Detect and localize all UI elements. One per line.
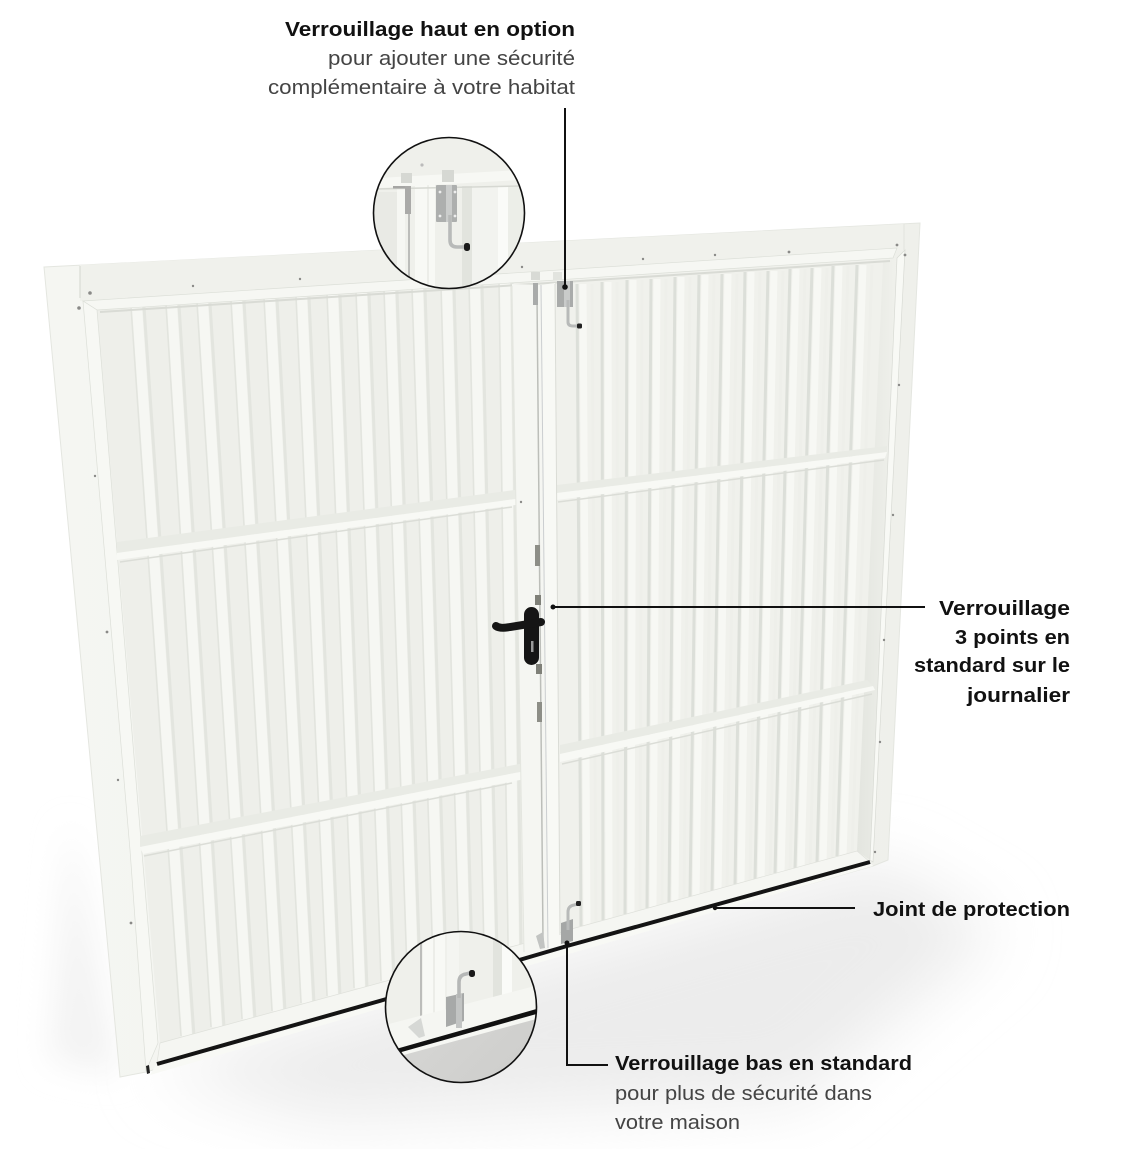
heading: top bolt: Verrouillage haut en option	[285, 19, 575, 41]
right door rail upper	[557, 446, 887, 502]
left door rail upper	[117, 488, 530, 562]
bottom rail	[157, 851, 870, 1063]
right door corrugated panel	[555, 258, 897, 935]
icon: top bolt on door	[557, 281, 582, 328]
text: top bolt line 1: pour ajouter une sécurité	[328, 48, 575, 70]
outer frame	[44, 223, 920, 1077]
left door corrugated panel	[97, 282, 530, 1043]
lock slots	[535, 545, 542, 722]
door centre stiles	[512, 284, 548, 957]
bottom seal	[157, 862, 870, 1064]
heading: three-point lock: journalier	[966, 685, 1070, 707]
heading: three-point lock: 3 points en	[955, 627, 1070, 649]
garage door	[44, 223, 920, 1077]
right door rail lower	[560, 680, 875, 764]
lens: bottom bolt detail	[384, 930, 538, 1084]
left stile	[83, 301, 158, 1071]
text: bottom bolt line 1: pour plus de sécurité dans	[615, 1083, 872, 1105]
callout: three-point lock	[550, 598, 1070, 707]
small gussets	[531, 272, 540, 280]
heading: bottom bolt: Verrouillage bas en standard	[615, 1053, 912, 1075]
top rail	[83, 248, 897, 310]
lens: top bolt detail	[372, 136, 526, 290]
lower rod foot	[536, 932, 545, 949]
wall shadow left	[50, 820, 118, 1075]
icon: lower bolt on door	[561, 901, 581, 944]
text: bottom bolt line 2: votre maison	[615, 1112, 740, 1134]
lens ribs	[447, 925, 459, 1015]
icon: door handle	[496, 607, 541, 665]
right return face	[857, 258, 897, 860]
lock rod	[537, 295, 543, 940]
screws	[77, 244, 906, 924]
leader line: top bolt	[562, 108, 568, 290]
heading: three-point lock	[914, 598, 1070, 707]
callout: seal	[713, 899, 1070, 921]
right stile	[870, 250, 905, 862]
icon: rod bracket top	[533, 283, 538, 305]
floor shadow	[150, 862, 1000, 1120]
text: top bolt line 2: complémentaire à votre habitat	[268, 77, 575, 99]
bottom strip	[150, 862, 873, 1075]
callout: top bolt	[268, 19, 575, 290]
leader line: seal	[713, 906, 855, 910]
heading: three-point lock: Verrouillage	[939, 598, 1070, 620]
callout: bottom bolt	[564, 940, 912, 1134]
heading: three-point lock: standard sur le	[914, 655, 1070, 677]
left door rail lower	[140, 762, 530, 856]
lens ribs	[462, 186, 472, 296]
leader line: three-point lock	[550, 604, 925, 610]
header band	[80, 224, 904, 301]
leader line: bottom bolt	[564, 940, 608, 1065]
heading: seal: Joint de protection	[873, 899, 1070, 921]
